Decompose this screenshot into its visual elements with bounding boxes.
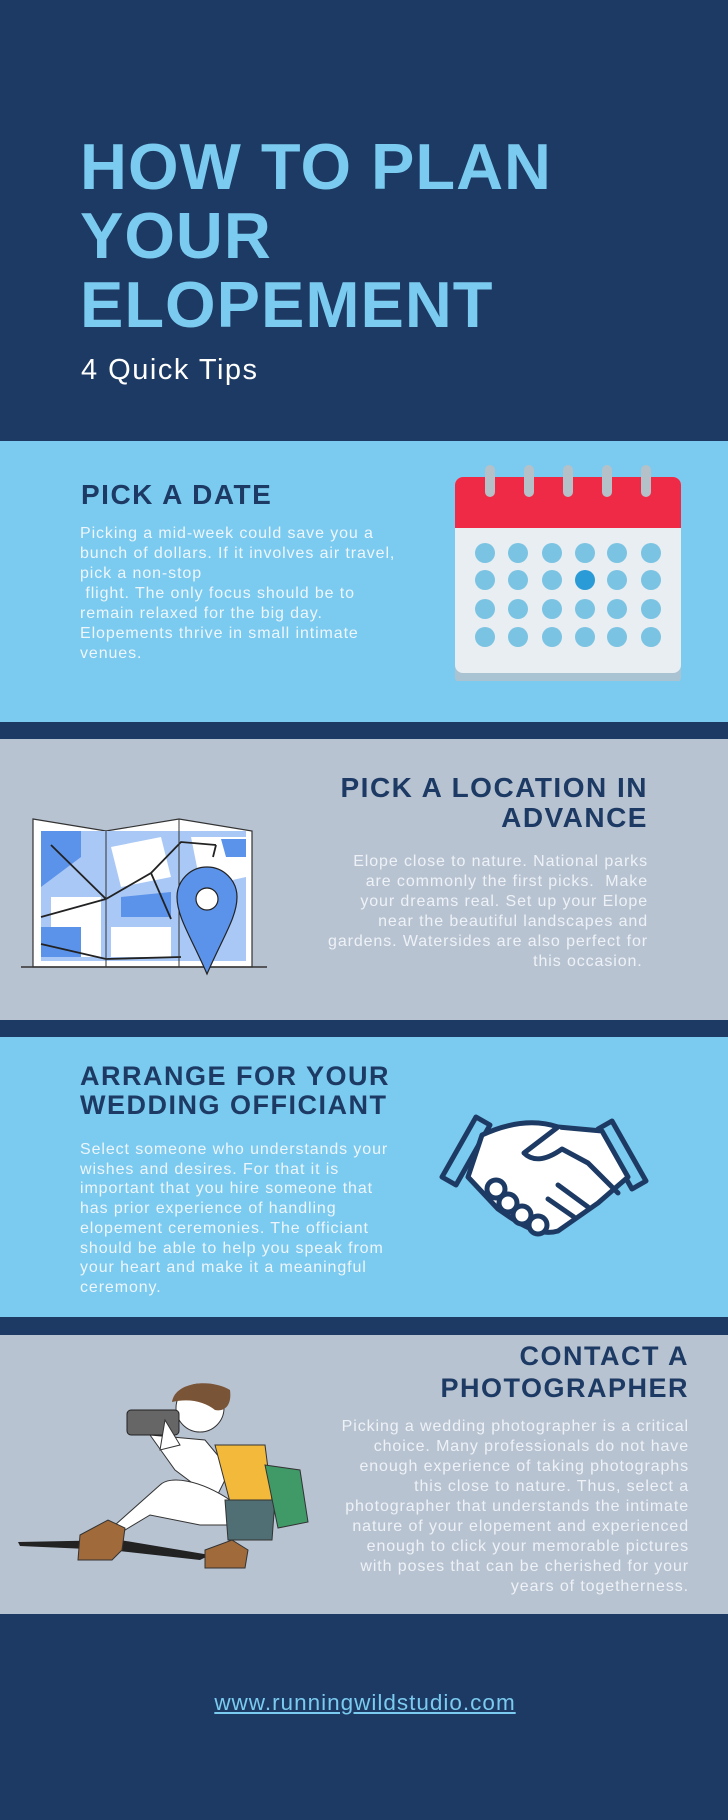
text: pick a date: Picking a mid-week could save you a (80, 525, 374, 542)
text: location: Elope close to nature. National parks (353, 853, 648, 870)
subtitle: 4 Quick Tips (81, 354, 259, 386)
title (80, 130, 552, 341)
heading: location: PICK A LOCATION IN (340, 772, 648, 803)
text: officiant: important that you hire someone that (80, 1180, 373, 1197)
panel: pick a date (0, 441, 728, 722)
icon: map with pin (21, 818, 267, 976)
heading: officiant: WEDDING OFFICIANT (80, 1090, 387, 1120)
heading: pick a date: PICK A DATE (81, 479, 272, 510)
text: pick a date: Elopements thrive in small intimate (80, 625, 359, 642)
text: pick a date: remain relaxed for the big day. (80, 605, 323, 622)
text: photographer: years of togetherness. (511, 1578, 689, 1595)
text: officiant: ceremony. (80, 1279, 162, 1296)
text: photographer: enough to click your memorable pictures (367, 1538, 689, 1555)
illustration: photographer (18, 1383, 308, 1568)
heading: location (340, 772, 648, 833)
text: photographer: Picking a wedding photographer is a critical (342, 1418, 689, 1435)
text: pick a date: flight. The only focus should be to (85, 585, 355, 602)
heading: photographer: CONTACT A (520, 1341, 689, 1371)
text: photographer: photographer that understands the intimate (345, 1498, 689, 1515)
text: officiant: should be able to help you speak from (80, 1240, 384, 1257)
text: officiant (80, 1141, 388, 1296)
heading: photographer: PHOTOGRAPHER (440, 1373, 689, 1403)
panel: officiant (0, 1037, 728, 1317)
text: location (328, 853, 648, 970)
text: location: gardens. Watersides are also perfect for (328, 933, 648, 950)
text: location: your dreams real. Set up your Elope (360, 893, 648, 910)
text: pick a date (80, 525, 395, 662)
icon: calendar (455, 465, 681, 681)
heading: photographer (440, 1341, 689, 1403)
text: officiant: has prior experience of handling (80, 1200, 337, 1217)
text: photographer: with poses that can be cherished for your (360, 1558, 689, 1575)
text: location: this occasion. (533, 953, 643, 970)
icon: handshake (440, 1114, 648, 1236)
heading: location: ADVANCE (501, 802, 648, 833)
text: pick a date: bunch of dollars. If it involves air travel, (80, 545, 395, 562)
text: photographer: choice. Many professionals do not have (374, 1438, 689, 1455)
title: ELOPEMENT (80, 268, 493, 341)
text: photographer: nature of your elopement and experienced (352, 1518, 689, 1535)
text: photographer: enough experience of taking photographs (359, 1458, 689, 1475)
footer link: www.runningwildstudio.com (214, 1690, 516, 1715)
title: YOUR (80, 199, 272, 272)
text: location: are commonly the first picks. Make (366, 873, 648, 890)
text: location: near the beautiful landscapes and (378, 913, 648, 930)
heading: officiant: ARRANGE FOR YOUR (80, 1061, 390, 1091)
text: officiant: elopement ceremonies. The officiant (80, 1220, 369, 1237)
panel: photographer (0, 1335, 728, 1614)
text: photographer (342, 1418, 689, 1595)
panel: pick a location (0, 739, 728, 1020)
heading: officiant (80, 1061, 390, 1120)
text: officiant: Select someone who understands your (80, 1141, 388, 1158)
text: photographer: this close to nature. Thus, select a (414, 1478, 689, 1495)
text: officiant: wishes and desires. For that it is (80, 1161, 339, 1178)
text: officiant: your heart and make it a meaningful (80, 1259, 367, 1276)
title: HOW TO PLAN (80, 130, 552, 203)
text: pick a date: venues. (80, 645, 142, 662)
text: pick a date: pick a non-stop (80, 565, 202, 582)
